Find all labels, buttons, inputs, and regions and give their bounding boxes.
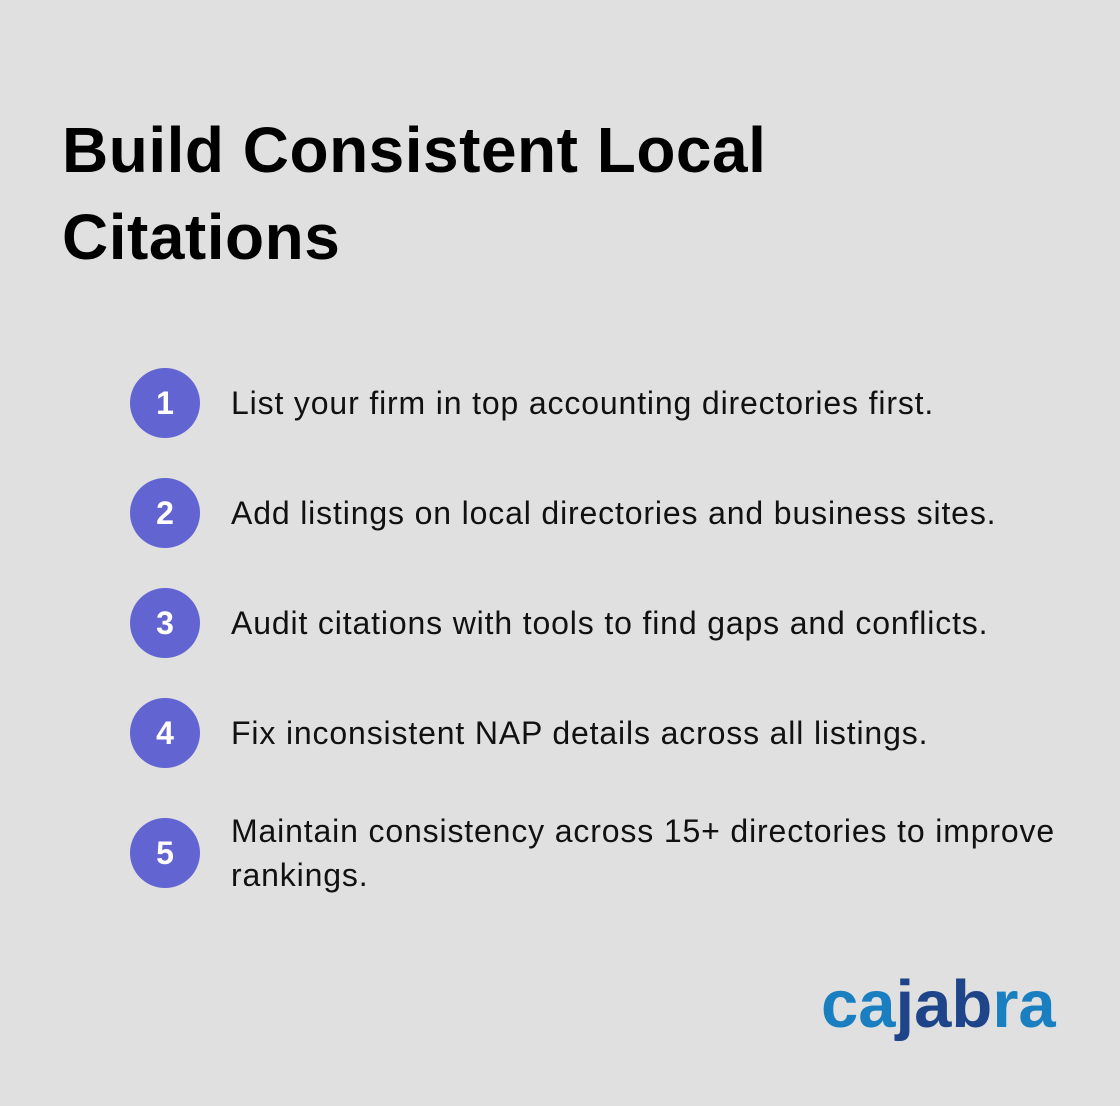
step 4: Fix inconsistent NAP details across all listings. xyxy=(231,715,928,751)
step 2 xyxy=(130,478,996,548)
step 1: List your firm in top accounting directories first. xyxy=(231,385,934,421)
step 4 xyxy=(130,698,928,768)
step 3: 3 xyxy=(156,605,174,641)
step 5: 5 xyxy=(156,835,174,871)
step 3: Audit citations with tools to find gaps and conflicts. xyxy=(231,605,988,641)
step 2: 2 xyxy=(156,495,174,531)
step 4: 4 xyxy=(156,715,174,751)
step 2: Add listings on local directories and business sites. xyxy=(231,495,996,531)
step 5: Maintain consistency across 15+ directories to improve rankings. xyxy=(231,813,1055,893)
title xyxy=(62,114,766,273)
logo: cajabra xyxy=(821,967,1056,1042)
title: Citations xyxy=(62,201,340,273)
title: Build Consistent Local xyxy=(62,114,766,186)
step 3 xyxy=(130,588,988,658)
step 1 xyxy=(130,368,934,438)
step 1: 1 xyxy=(156,385,174,421)
